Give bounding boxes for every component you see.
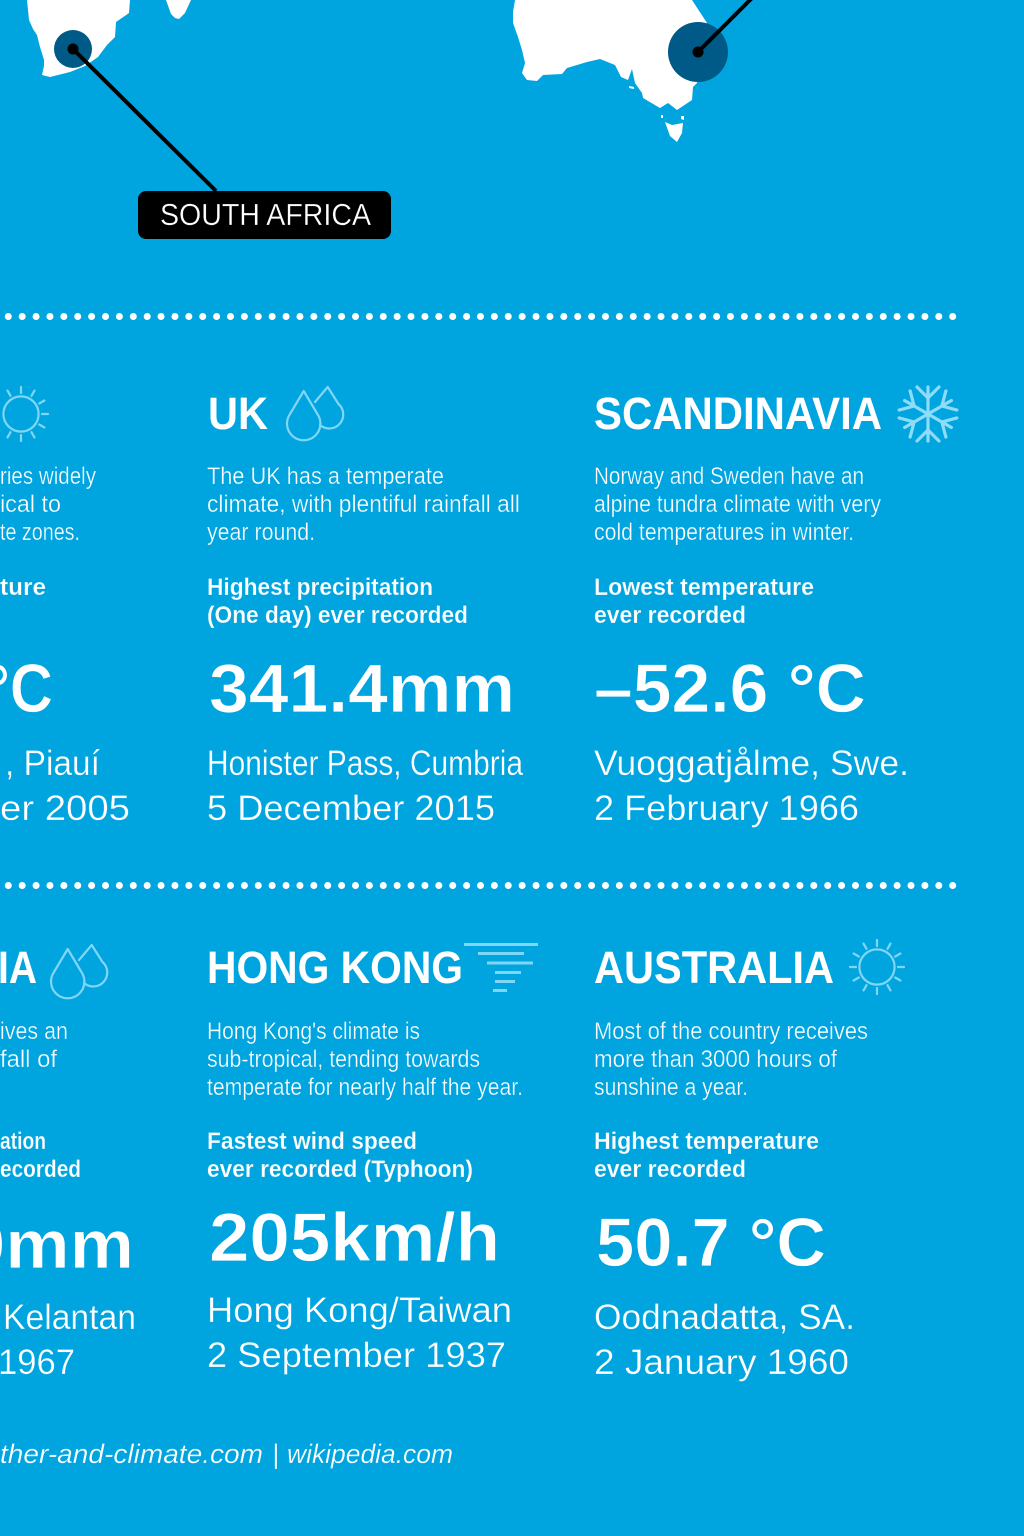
text: Brazil record location [0, 744, 130, 828]
text: Brazil description [0, 463, 96, 546]
text: Malaysia record label [0, 1128, 81, 1183]
text: Brazil record location: , Piauí [5, 744, 100, 783]
text: Malaysia description [0, 1018, 68, 1073]
number: 341.4mm: 341.4mm [209, 650, 515, 727]
text: Australia description: more than 3000 hours of [594, 1046, 837, 1073]
text: Brazil record location: er 2005 [0, 789, 130, 828]
text: Hong Kong description: sub-tropical, tending towards [207, 1046, 480, 1073]
panel: Australia [594, 940, 904, 1382]
text: Malaysia record location: Kelantan [3, 1298, 136, 1337]
heading: UK: UK [208, 388, 268, 439]
text: Hong Kong record location: Hong Kong/Taiwan [207, 1291, 512, 1330]
text: Malaysia record label: ation [0, 1128, 46, 1155]
text: Brazil description: ical to [0, 491, 61, 518]
text: Hong Kong description: Hong Kong's climate is [207, 1018, 420, 1045]
text: sources footer: wikipedia.com [287, 1439, 453, 1469]
panel: Scandinavia [594, 387, 957, 828]
text: Scandinavia description: cold temperatures in winter. [594, 519, 854, 546]
text: Scandinavia record label: Lowest temperature [594, 574, 814, 601]
heading: Scandinavia: SCANDINAVIA [594, 388, 882, 439]
icon: rain drops [51, 945, 107, 998]
icon: rain drops [287, 387, 343, 440]
map: Australia with marker [513, 0, 752, 142]
text: UK description [207, 463, 520, 546]
text: Malaysia record label: ecorded [0, 1156, 81, 1183]
text: UK description: climate, with plentiful rainfall all [207, 491, 520, 518]
heading: Hong Kong: HONG KONG [207, 942, 463, 993]
text: Malaysia description: fall of [0, 1046, 57, 1073]
text: Hong Kong record label: ever recorded (Typhoon) [207, 1156, 473, 1183]
text: UK record label [207, 574, 468, 629]
text: Australia record label: Highest temperature [594, 1128, 819, 1155]
text: Scandinavia record location [594, 744, 909, 828]
number: 50.7 °C: 50.7 °C [596, 1204, 826, 1281]
text: UK description: year round. [207, 519, 315, 546]
text: sources footer [0, 1439, 453, 1469]
text: Australia record location [594, 1298, 855, 1382]
text: Scandinavia description: alpine tundra climate with very [594, 491, 881, 518]
text: Australia description: Most of the country receives [594, 1018, 868, 1045]
text: sources footer: | [272, 1439, 279, 1469]
text: UK record label: Highest precipitation [207, 574, 433, 601]
text: Hong Kong description: temperate for nearly half the year. [207, 1074, 523, 1101]
text: UK description: The UK has a temperate [207, 463, 444, 490]
text: Australia record location: Oodnadatta, SA. [594, 1298, 855, 1337]
text: Scandinavia record label [594, 574, 814, 629]
icon: sun [850, 940, 904, 994]
text: Australia description [594, 1018, 868, 1101]
panel: Malaysia (cropped) [0, 942, 136, 1382]
text: Hong Kong record location [207, 1291, 512, 1375]
text: Malaysia record location: 1967 [0, 1343, 75, 1382]
heading: Australia: AUSTRALIA [594, 942, 834, 993]
icon: typhoon [464, 944, 538, 990]
text: Scandinavia description: Norway and Sweden have an [594, 463, 864, 490]
map: southern Africa with South Africa marker [27, 0, 216, 191]
text: Brazil description: te zones. [0, 519, 80, 546]
text: Hong Kong record label [207, 1128, 473, 1183]
text: Scandinavia description [594, 463, 881, 546]
text: UK record location: Honister Pass, Cumbria [207, 744, 523, 783]
text: Australia record location: 2 January 1960 [594, 1343, 849, 1382]
callout: South Africa [138, 191, 391, 239]
text: UK record location [207, 744, 523, 828]
text: Australia record label: ever recorded [594, 1156, 746, 1183]
text: Scandinavia record location: 2 February 1966 [594, 789, 859, 828]
text: sources footer: ther-and-climate.com [0, 1439, 263, 1469]
text: Australia description: sunshine a year. [594, 1074, 748, 1101]
panel: UK [207, 387, 523, 828]
icon: snowflake [899, 387, 957, 441]
text: Australia record label [594, 1128, 819, 1183]
icon: sun [3, 387, 48, 441]
text: Brazil description: ries widely [0, 463, 96, 490]
number: 205km/h: 205km/h [209, 1199, 500, 1276]
text: Scandinavia record label: ever recorded [594, 602, 746, 629]
number: -52.6 °C: –52.6 °C [594, 650, 866, 727]
text: Hong Kong record location: 2 September 1937 [207, 1336, 506, 1375]
text: Scandinavia record location: Vuoggatjålme, Swe. [594, 744, 909, 783]
text: Malaysia record location [0, 1298, 136, 1382]
text: Hong Kong description [207, 1018, 523, 1101]
text: UK record location: 5 December 2015 [207, 789, 495, 828]
panel: Brazil (cropped) [0, 387, 130, 828]
text: Hong Kong record label: Fastest wind speed [207, 1128, 417, 1155]
text: Brazil record label: ture [0, 574, 46, 601]
panel: Hong Kong [207, 942, 538, 1375]
callout: South Africa: SOUTH AFRICA [160, 197, 371, 232]
text: UK record label: (One day) ever recorded [207, 602, 468, 629]
text: Malaysia description: ives an [0, 1018, 68, 1045]
